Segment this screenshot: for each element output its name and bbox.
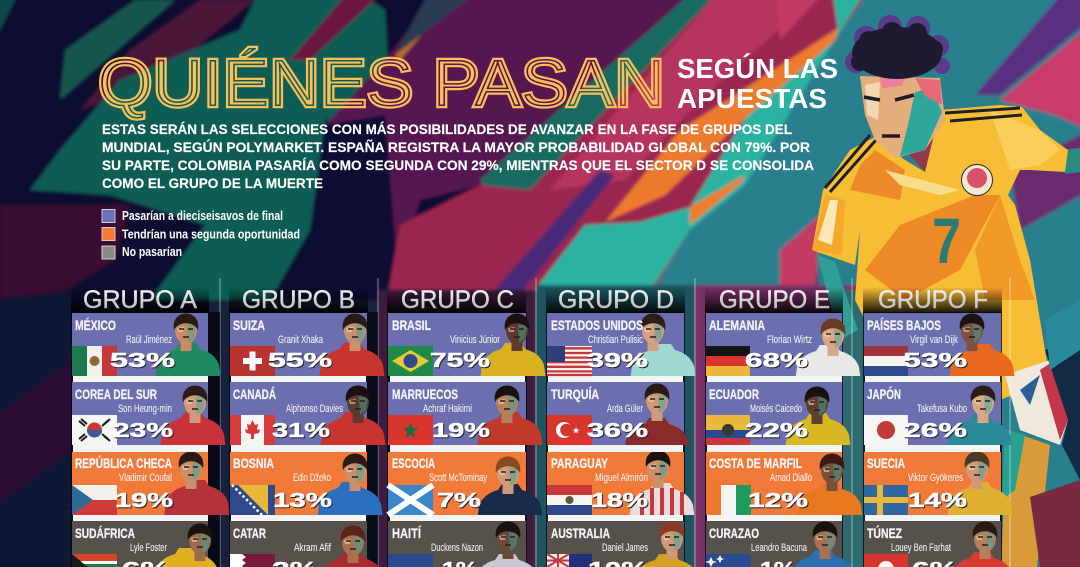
card: Estados Unidos — [547, 313, 696, 382]
card: Corea del Sur: COREA DEL SUR — [75, 386, 157, 402]
card: Haití: HAITÍ — [392, 525, 422, 541]
card: Brasil — [388, 313, 546, 382]
subtitle: APUESTAS — [677, 83, 827, 114]
card: Curazao: CURAZAO — [709, 525, 759, 541]
card: Marruecos — [388, 382, 542, 452]
panel: grupo B — [229, 286, 388, 567]
card: Paraguay: PARAGUAY — [551, 455, 608, 471]
heading: grupo D: GRUPO D — [558, 286, 674, 314]
card: Túnez: TÚNEZ — [867, 524, 902, 541]
card: Suecia: 14% — [908, 490, 967, 512]
card: Japón: JAPÓN — [867, 385, 901, 402]
card: Suiza: 55% — [268, 350, 332, 372]
heading: grupo E: GRUPO E — [719, 286, 830, 314]
card: Curazao — [705, 521, 858, 567]
card: Canadá — [230, 382, 386, 452]
card: Estados Unidos: Christian Pulisic — [588, 334, 643, 346]
legend: No pasarían — [122, 244, 182, 259]
card: México: MÉXICO — [75, 317, 116, 333]
card: Canadá: CANADÁ — [233, 386, 276, 402]
card: Sudáfrica: Lyle Foster — [130, 542, 167, 554]
card: República Checa — [72, 452, 230, 521]
card: Corea del Sur — [72, 382, 226, 452]
card: Suecia: Viktor Gyökeres — [908, 472, 963, 484]
panel: grupo E — [705, 286, 865, 567]
card: República Checa: REPÚBLICA CHECA — [75, 454, 172, 471]
card: Brasil: 75% — [430, 350, 490, 372]
card: Haití: Duckens Nazon — [431, 542, 483, 554]
card: Bosnia: 13% — [273, 490, 332, 512]
card: Canadá: 31% — [272, 420, 330, 442]
card: Paraguay: Miguel Almirón — [595, 472, 648, 484]
card: Suiza — [230, 313, 384, 382]
card: Suecia — [864, 452, 1012, 521]
card: Costa de Marfil: 12% — [748, 490, 808, 512]
subtitle — [677, 53, 838, 114]
card: República Checa: Vladimir Coufal — [119, 472, 172, 484]
card: Turquía: Arda Güler — [607, 403, 643, 415]
legend — [102, 208, 300, 259]
card: Turquía: 36% — [587, 420, 648, 442]
card: Australia — [547, 521, 702, 567]
card: Suiza: Granit Xhaka — [278, 334, 324, 346]
heading: grupo B: GRUPO B — [242, 286, 355, 314]
panel: grupo C — [387, 286, 548, 567]
card: Paraguay — [547, 452, 694, 521]
card: Escocia: ESCOCIA — [392, 455, 435, 471]
card: Túnez: Louey Ben Farhat — [891, 542, 951, 554]
card: Brasil: Vinicius Júnior — [450, 334, 500, 346]
intro text: MUNDIAL, SEGÚN POLYMARKET. ESPAÑA REGISTRA LA MAYOR PROBABILIDAD GLOBAL CON 79%. POR — [102, 140, 810, 155]
card: Costa de Marfil: COSTA DE MARFIL — [709, 455, 802, 471]
card: Australia: AUSTRALIA — [551, 525, 610, 541]
card: Corea del Sur: Son Heung-min — [118, 403, 172, 415]
card: Suecia: SUECIA — [867, 455, 905, 471]
card: Alemania: Florian Wirtz — [767, 334, 812, 346]
card: Ecuador — [706, 382, 850, 452]
card: Canadá: Alphonso Davies — [286, 403, 343, 415]
card: Sudáfrica: SUDÁFRICA — [75, 525, 135, 541]
card: Paraguay: 18% — [591, 490, 648, 512]
card: Japón — [864, 382, 1012, 452]
card: Australia: Daniel James — [602, 542, 648, 554]
card: Alemania — [706, 313, 860, 382]
card: Catar: Akram Afif — [294, 542, 332, 554]
legend: Tendrían una segunda oportunidad — [122, 226, 300, 242]
card: México: Raúl Jiménez — [126, 334, 172, 346]
legend: Pasarían a dieciseisavos de final — [122, 208, 283, 223]
title: QUIÉNES PASAN — [98, 46, 665, 121]
card: Alemania: 68% — [745, 350, 808, 372]
intro text: SU PARTE, COLOMBIA PASARÍA COMO SEGUNDA CON 29%, MIENTRAS QUE EL SECTOR D SE CONSOLIDA — [102, 158, 814, 173]
card: Países Bajos: 53% — [903, 350, 967, 372]
card: Catar: CATAR — [233, 525, 266, 541]
card: Costa de Marfil — [706, 452, 862, 521]
heading: grupo A: GRUPO A — [83, 286, 197, 314]
card: Bosnia — [230, 452, 382, 521]
card: Alemania: ALEMANIA — [709, 317, 765, 333]
card: Marruecos: MARRUECOS — [392, 386, 458, 402]
card: Ecuador: Moisés Caicedo — [750, 403, 802, 415]
card: Turquía: TURQUÍA — [551, 386, 599, 402]
large illustrated player in Colombia shirt — [812, 15, 1080, 567]
panel: grupo F — [863, 286, 1017, 567]
card: Ecuador: 22% — [745, 420, 808, 442]
intro text — [102, 122, 814, 191]
card: Turquía — [547, 382, 689, 452]
card: Países Bajos: PAÍSES BAJOS — [867, 317, 941, 333]
card: Catar — [230, 521, 387, 567]
large illustrated player in Colombia shirt: 7 — [932, 205, 961, 277]
intro text: COMO EL GRUPO DE LA MUERTE — [102, 176, 323, 191]
heading: grupo F: GRUPO F — [878, 286, 988, 314]
card: Curazao: Leandro Bacuna — [751, 542, 808, 554]
card: Bosnia: BOSNIA — [233, 455, 274, 471]
card: Suiza: SUIZA — [233, 317, 265, 333]
column dividers — [220, 278, 1010, 567]
card: Japón: 26% — [903, 420, 967, 442]
card: Haití — [388, 521, 542, 567]
card: Ecuador: ECUADOR — [709, 386, 759, 402]
panel: grupo D — [546, 286, 702, 567]
card: Corea del Sur: 23% — [113, 420, 173, 442]
panel: grupo A — [71, 286, 232, 567]
card: Túnez — [864, 521, 1017, 567]
card: Escocia — [386, 452, 542, 521]
card: Bosnia: Edin Džeko — [293, 472, 331, 484]
card: Japón: Takefusa Kubo — [917, 403, 967, 415]
card: Marruecos: 19% — [432, 420, 490, 442]
card: México — [72, 313, 220, 382]
card: México: 53% — [110, 350, 175, 372]
subtitle: SEGÚN LAS — [677, 53, 838, 84]
card: Escocia: Scott McTominay — [429, 472, 487, 484]
card: República Checa: 19% — [115, 490, 173, 512]
card: Estados Unidos: 39% — [587, 350, 648, 372]
card: Brasil: BRASIL — [392, 317, 431, 333]
title: QUIÉNES PASAN — [98, 46, 665, 121]
card: Sudáfrica — [72, 521, 222, 567]
card: Países Bajos: Virgil van Dijk — [910, 334, 958, 346]
card: Estados Unidos: ESTADOS UNIDOS — [551, 317, 643, 333]
card: Costa de Marfil: Amad Diallo — [770, 472, 812, 484]
intro text: ESTAS SERÁN LAS SELECCIONES CON MÁS POSIBILIDADES DE AVANZAR EN LA FASE DE GRUPOS DEL — [102, 122, 792, 137]
card: Países Bajos — [864, 313, 1014, 382]
card: Escocia: 7% — [437, 490, 481, 512]
card: Marruecos: Achraf Hakimi — [423, 403, 472, 415]
heading: grupo C: GRUPO C — [401, 286, 514, 314]
